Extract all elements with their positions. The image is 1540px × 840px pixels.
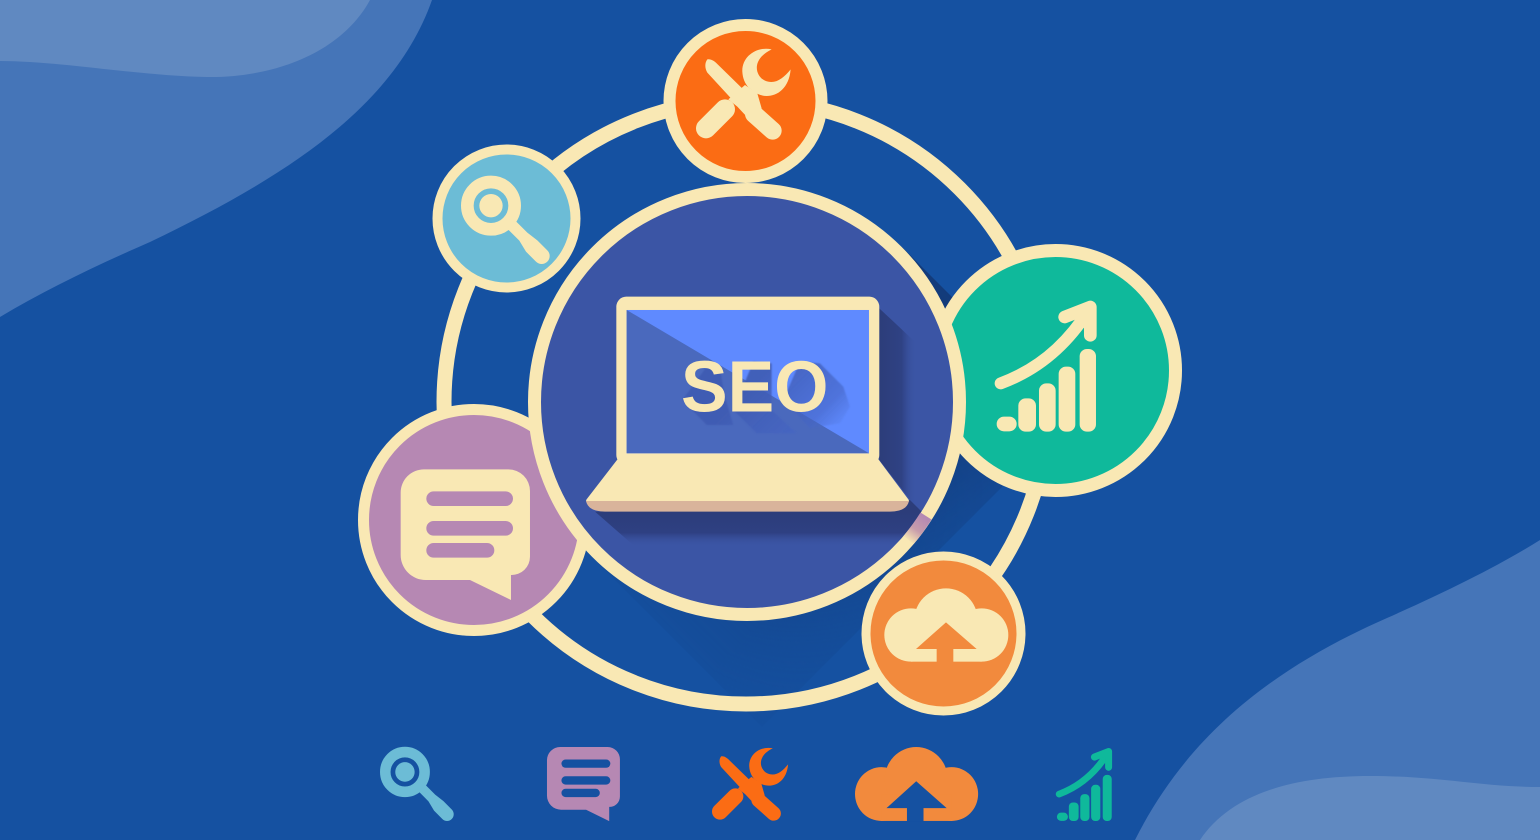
laptop lid xyxy=(616,297,879,465)
laptop base lip xyxy=(586,501,909,512)
circle: chat xyxy=(364,410,584,630)
laptop base xyxy=(586,458,909,502)
bottom icon: magnifying glass xyxy=(385,752,454,821)
bottom icon: tools xyxy=(719,748,788,813)
SEO label: SEO xyxy=(681,347,828,428)
icon: cloud with up arrow xyxy=(884,588,1008,662)
bottom icon: growth chart xyxy=(1057,751,1112,821)
laptop screen xyxy=(627,310,869,453)
outer orbit ring xyxy=(444,100,1048,704)
purple smear on ring xyxy=(909,516,926,540)
circle: magnifier xyxy=(438,150,576,288)
central circle with laptop xyxy=(534,190,960,614)
long shadow of central circle xyxy=(706,247,1003,656)
background blob: bottom right xyxy=(1135,540,1540,840)
icon: speech bubble xyxy=(401,469,530,600)
circle: cloud upload xyxy=(866,556,1021,711)
circle: tools xyxy=(670,25,822,177)
background blob: top left xyxy=(0,0,432,317)
icon: crossed screwdriver and wrench xyxy=(705,49,791,131)
icon: rising bars with arrow xyxy=(997,306,1096,432)
icon: magnifying glass xyxy=(467,182,550,264)
bottom icon: cloud upload xyxy=(855,747,978,821)
laptop drop shadow xyxy=(595,308,930,547)
circle: growth chart xyxy=(936,250,1176,490)
bottom icon: speech bubble xyxy=(547,747,620,821)
laptop xyxy=(586,297,909,512)
bottom icon row xyxy=(385,747,1112,821)
